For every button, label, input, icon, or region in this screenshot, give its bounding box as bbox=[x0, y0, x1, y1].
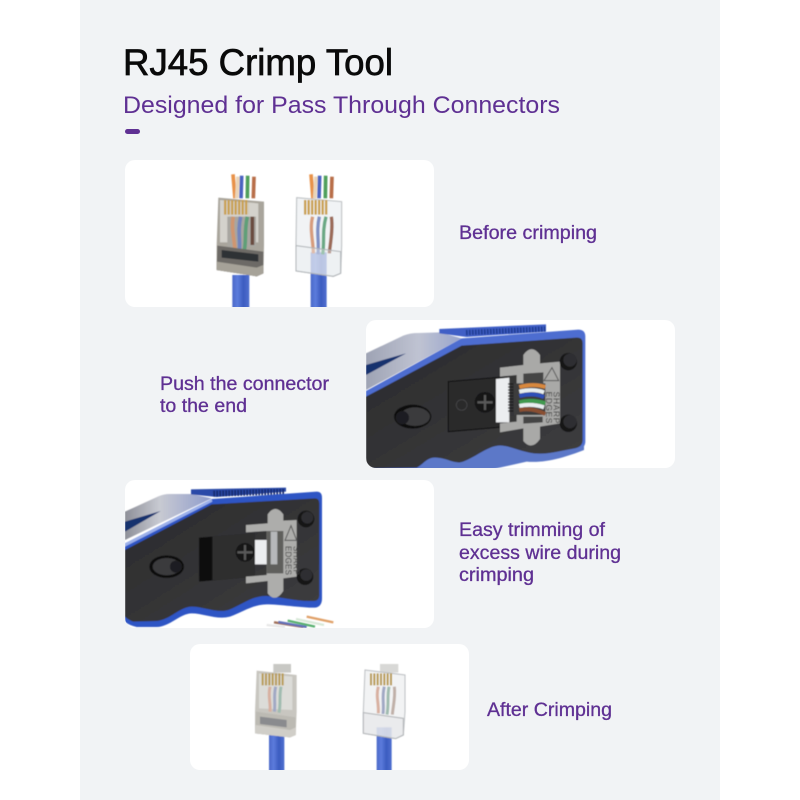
icon: crimp tool trimming wires bbox=[125, 488, 322, 627]
icon: trimmed wire pieces bbox=[267, 617, 333, 627]
icon: crimp tool with wires inserted: EDGES bbox=[544, 392, 554, 424]
label: easy trimming: excess wire during bbox=[459, 543, 621, 564]
panel: after crimping bbox=[190, 644, 469, 772]
icon: crimped transparent connector bbox=[363, 664, 405, 772]
icon: crimp tool with wires inserted bbox=[366, 324, 585, 470]
icon: crimp tool trimming wires: EDGES bbox=[284, 546, 293, 575]
panel: before crimping bbox=[125, 160, 434, 308]
label: easy trimming: Easy trimming of bbox=[459, 520, 606, 541]
label: after crimping: After Crimping bbox=[487, 700, 612, 721]
icon: shielded connector with wires bbox=[217, 174, 264, 308]
icon: transparent connector with wires bbox=[296, 174, 342, 308]
page background panel bbox=[80, 0, 720, 800]
label: easy trimming: crimping bbox=[459, 565, 534, 586]
title: RJ45 Crimp Tool bbox=[123, 42, 393, 83]
panel: push connector bbox=[366, 320, 675, 470]
label: before crimping: Before crimping bbox=[459, 223, 597, 244]
subtitle: Designed for Pass Through Connectors bbox=[123, 92, 560, 119]
icon: crimp tool trimming wires: SHARP bbox=[291, 546, 300, 575]
icon: crimp tool with wires inserted: SHARP bbox=[551, 392, 561, 424]
label: push the connector: Push the connector bbox=[160, 374, 330, 395]
icon: crimped shielded connector bbox=[255, 664, 297, 772]
panel: trimming bbox=[125, 480, 434, 628]
accent pill bbox=[125, 129, 140, 134]
label: push the connector: to the end bbox=[160, 396, 247, 417]
